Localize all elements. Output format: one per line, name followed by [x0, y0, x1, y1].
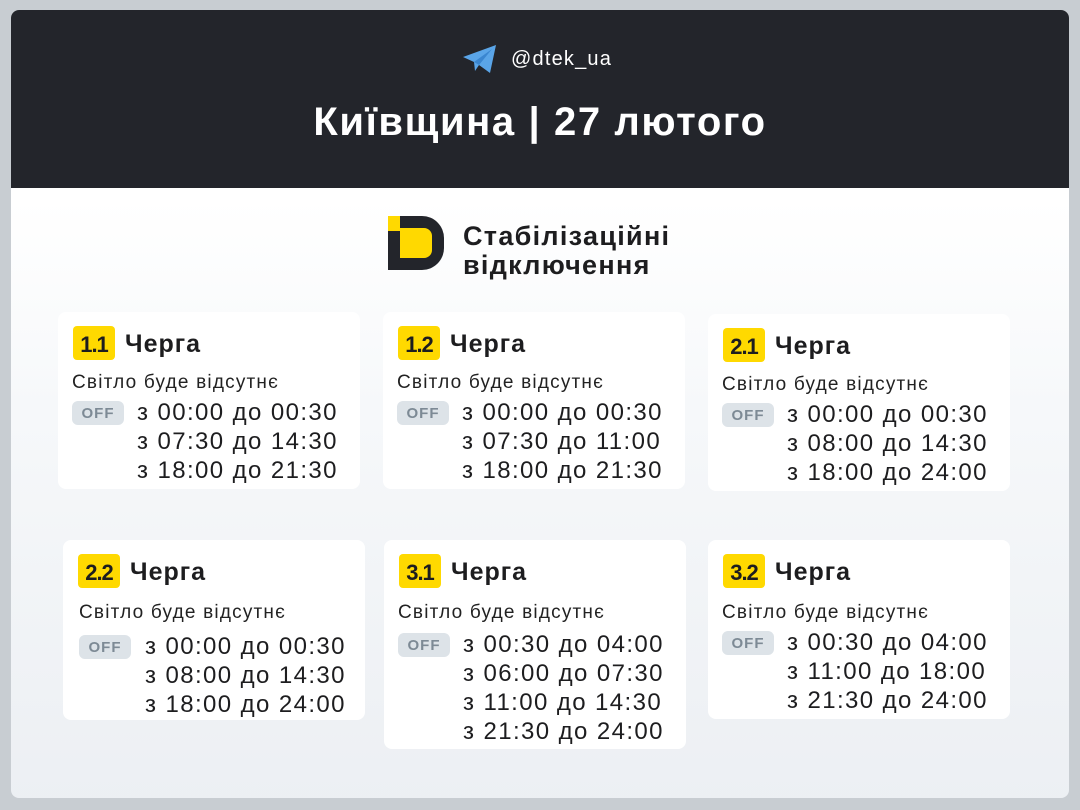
- card 2.2: з 18:00 до 24:00: [145, 691, 346, 718]
- card 3.2: Світло буде відсутнє: [722, 602, 929, 623]
- card 3.1: з 00:30 до 04:00: [463, 631, 664, 658]
- card 2.1: з 08:00 до 14:30: [787, 430, 988, 457]
- card 1.1: OFF: [82, 405, 114, 422]
- card 1.2: 1.2: [405, 332, 433, 357]
- card 3.2: з 11:00 до 18:00: [787, 658, 986, 685]
- card 2.2: [63, 540, 365, 720]
- icon: DTEK logo: [388, 216, 444, 270]
- card 1.1: 1.1: [80, 332, 108, 357]
- card 3.1: Черга: [451, 558, 527, 586]
- card 3.2: з 00:30 до 04:00: [787, 629, 988, 656]
- card 3.2: [708, 540, 1010, 719]
- card 1.2: з 00:00 до 00:30: [462, 399, 663, 426]
- card 3.2: Черга: [775, 558, 851, 586]
- card 1.2: з 07:30 до 11:00: [462, 428, 661, 455]
- card 3.1: 3.1: [406, 560, 434, 585]
- card 3.1: OFF: [408, 637, 440, 654]
- card 2.2: OFF: [88, 639, 122, 656]
- card 2.1: [708, 314, 1010, 491]
- card 1.2: Черга: [450, 330, 526, 358]
- telegram handle: [463, 45, 612, 73]
- card 3.2: з 21:30 до 24:00: [787, 687, 988, 714]
- logo and subtitle: відключення: [463, 250, 651, 280]
- card 1.1: Черга: [125, 330, 201, 358]
- card 2.1: OFF: [732, 407, 764, 424]
- card 2.1: з 00:00 до 00:30: [787, 401, 988, 428]
- icon: telegram: [463, 45, 496, 73]
- card 3.1: [384, 540, 686, 749]
- card 1.1: Світло буде відсутнє: [72, 372, 279, 393]
- card 2.2: 2.2: [85, 560, 113, 585]
- card 2.2: з 00:00 до 00:30: [145, 633, 346, 660]
- card 1.1: [58, 312, 360, 489]
- card 2.2: Черга: [130, 558, 206, 586]
- card 2.2: Світло буде відсутнє: [79, 602, 286, 623]
- card 1.2: OFF: [406, 405, 440, 422]
- card 3.1: Світло буде відсутнє: [398, 602, 605, 623]
- card 1.1: з 00:00 до 00:30: [137, 399, 338, 426]
- card 1.2: Світло буде відсутнє: [397, 372, 604, 393]
- card 3.1: з 06:00 до 07:30: [463, 660, 664, 687]
- card 2.2: з 08:00 до 14:30: [145, 662, 346, 689]
- card 3.2: 3.2: [730, 560, 758, 585]
- card 2.1: з 18:00 до 24:00: [787, 459, 988, 486]
- card 3.1: з 21:30 до 24:00: [463, 718, 664, 745]
- card 2.1: Світло буде відсутнє: [722, 374, 929, 395]
- card 3.2: OFF: [732, 635, 764, 652]
- card 1.2: з 18:00 до 21:30: [462, 457, 663, 484]
- card 1.2: [383, 312, 685, 489]
- header band: [11, 10, 1069, 188]
- card 1.1: з 07:30 до 14:30: [137, 428, 338, 455]
- telegram handle: @dtek_ua: [511, 48, 612, 70]
- logo and subtitle: Стабілізаційні: [463, 221, 670, 251]
- logo and subtitle: [388, 216, 670, 280]
- title: Київщина | 27 лютого: [313, 100, 767, 144]
- card 2.1: Черга: [775, 332, 851, 360]
- card 2.1: 2.1: [730, 334, 758, 359]
- card 3.1: з 11:00 до 14:30: [463, 689, 662, 716]
- card 1.1: з 18:00 до 21:30: [137, 457, 338, 484]
